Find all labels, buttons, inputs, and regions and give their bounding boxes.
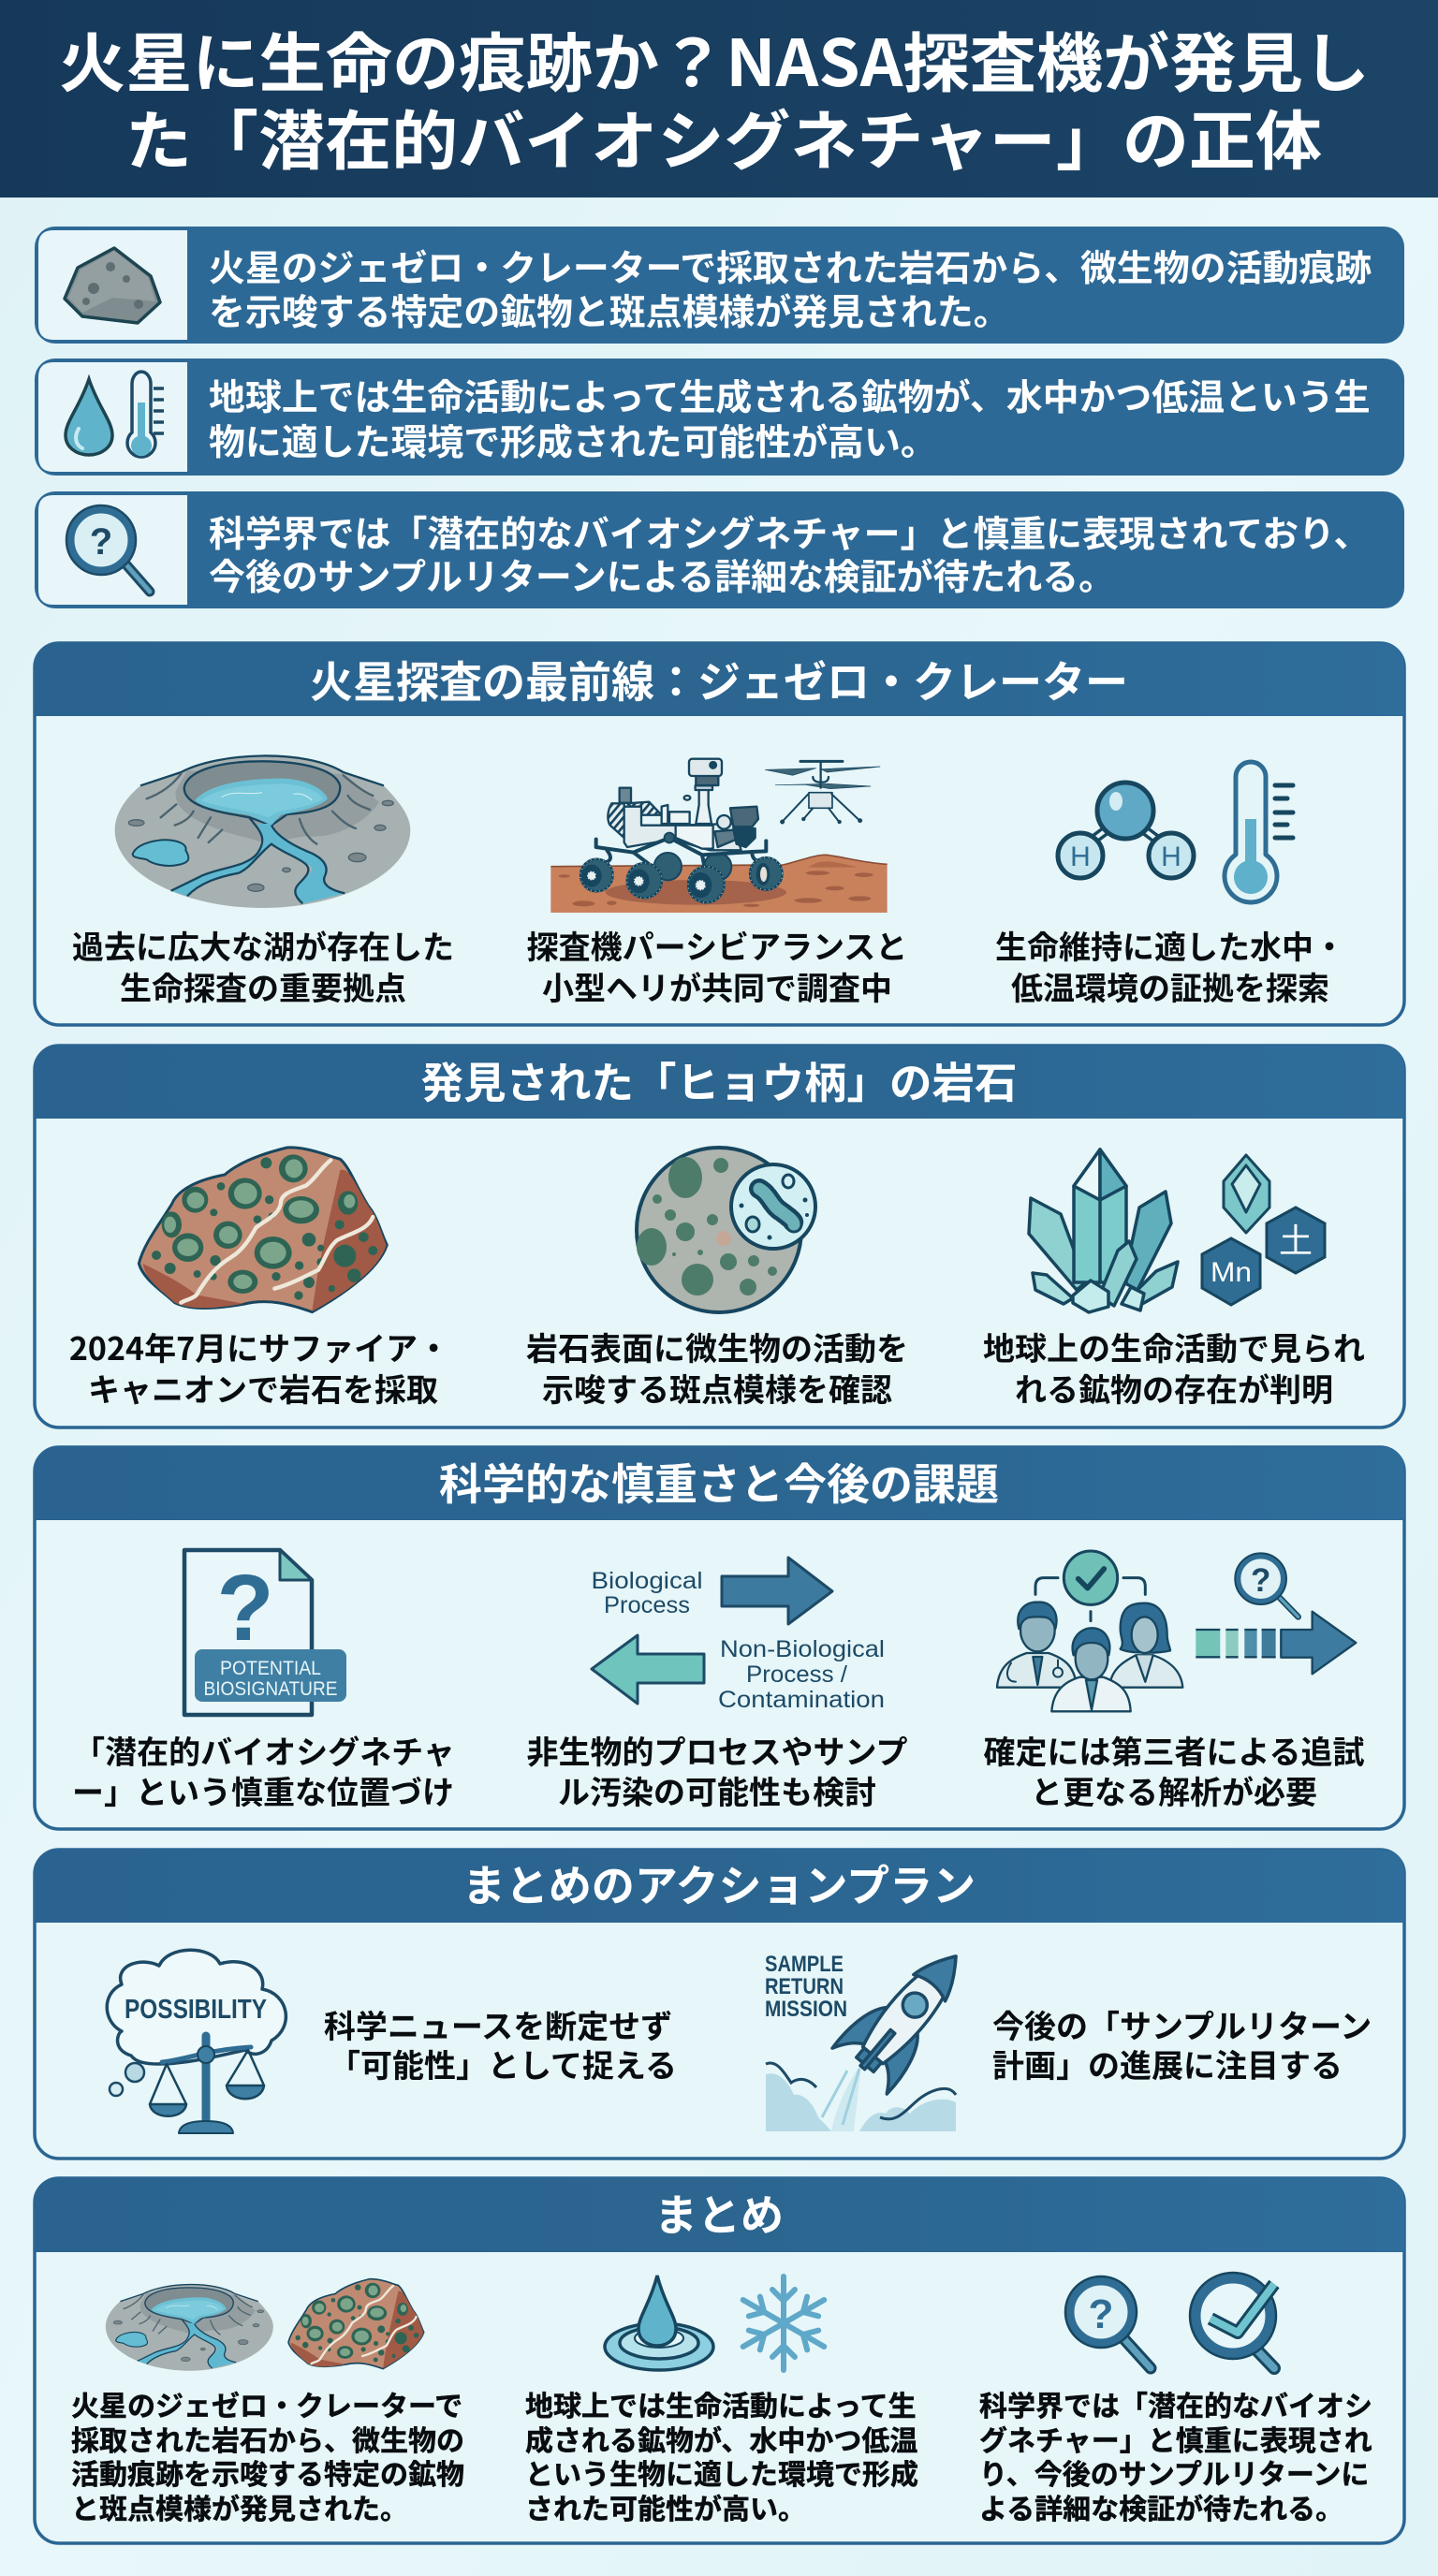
panel heading: まとめのアクションプラン bbox=[462, 1862, 976, 1910]
caption 3: れる鉱物の存在が判明 bbox=[1015, 1372, 1333, 1409]
mission label bbox=[765, 1952, 847, 2022]
icon: possibility cloud: POSSIBILITY bbox=[125, 1995, 267, 2025]
caption 3 bbox=[984, 1735, 1364, 1811]
caption 1: キャニオンで岩石を採取 bbox=[88, 1373, 438, 1409]
summary text 3: 今後のサンプルリターンによる詳細な検証が待たれる。 bbox=[209, 558, 1115, 598]
summary text 2: 地球上では生命活動によって生 bbox=[525, 2392, 917, 2422]
action text 1: 「可能性」として捉える bbox=[329, 2049, 677, 2085]
icon: drop with ripples bbox=[605, 2276, 713, 2370]
summary text 1: 火星のジェゼロ・クレーターで bbox=[71, 2392, 462, 2422]
panel: Jezero crater bbox=[35, 643, 1404, 1025]
summary text 1 bbox=[71, 2392, 464, 2525]
illustration: crater lake bbox=[115, 755, 410, 908]
icon: thermometer bbox=[1225, 762, 1293, 902]
smoke bbox=[766, 2073, 956, 2131]
caption 2 bbox=[527, 930, 907, 1007]
helicopter bbox=[765, 761, 880, 824]
rocket bbox=[832, 1933, 983, 2094]
icon: water molecule bbox=[1058, 783, 1194, 878]
summary text 3: グネチャー」と慎重に表現され bbox=[979, 2426, 1372, 2457]
summary text 3: 科学界では「潜在的なバイオシグネチャー」と慎重に表現されており、 bbox=[209, 515, 1370, 555]
summary text 3 bbox=[209, 515, 1370, 598]
icon: magnifier with question: ? bbox=[90, 521, 112, 563]
icon: mini leopard rock bbox=[288, 2279, 424, 2369]
caption 2 bbox=[527, 1735, 907, 1811]
panel: leopard rock bbox=[35, 1046, 1404, 1427]
caption 3 bbox=[983, 1332, 1365, 1409]
ground bbox=[550, 855, 888, 913]
summary text 3: り、今後のサンプルリターンに bbox=[979, 2460, 1369, 2491]
summary text 2: された可能性が高い。 bbox=[525, 2494, 806, 2525]
icon: snowflake bbox=[738, 2276, 829, 2370]
summary bar 2 bbox=[35, 359, 1404, 476]
caption 3: 確定には第三者による追試 bbox=[984, 1735, 1364, 1771]
summary text 1: 採取された岩石から、微生物の bbox=[71, 2426, 464, 2457]
caption 2: ル汚染の可能性も検討 bbox=[558, 1776, 876, 1811]
illustration: rover and helicopter bbox=[550, 759, 888, 913]
caption 3 bbox=[995, 930, 1345, 1007]
caption 1: 2024年7月にサファイア・ bbox=[69, 1324, 449, 1369]
icon: element hexagon Mn bbox=[1202, 1238, 1260, 1305]
caption 2: 非生物的プロセスやサンプ bbox=[527, 1735, 907, 1771]
panel: scientific caution bbox=[35, 1447, 1404, 1829]
action text 2: 計画」の進展に注目する bbox=[992, 2049, 1343, 2085]
caption 1 bbox=[72, 1735, 455, 1811]
summary text 1 bbox=[209, 249, 1372, 333]
panel heading bbox=[35, 1447, 1404, 1520]
summary text 1: と斑点模様が発見された。 bbox=[71, 2494, 408, 2525]
illustration: peer review team bbox=[997, 1551, 1356, 1711]
rear wheels bbox=[654, 853, 731, 881]
icon: balance scale bbox=[150, 2036, 264, 2133]
icon: document with question mark bbox=[184, 1550, 346, 1715]
illustration: crystals bbox=[1029, 1149, 1178, 1312]
summary text 2: という生物に適した環境で形成 bbox=[525, 2460, 918, 2491]
panel heading bbox=[35, 2178, 1404, 2252]
illustration: spotted rock with microbe inset bbox=[637, 1148, 815, 1312]
caption 1: 「潜在的バイオシグネチャ bbox=[73, 1735, 455, 1771]
action text 2: 今後の「サンプルリターン bbox=[992, 2010, 1372, 2045]
summary bar 3 bbox=[35, 491, 1404, 608]
left doctor bbox=[997, 1603, 1077, 1688]
icon: magnifier with question bbox=[66, 505, 150, 592]
title line 1: 火星に生命の痕跡か？NASA探査機が発見し bbox=[59, 11, 1370, 105]
summary text 2: 物に適した環境で形成された可能性が高い。 bbox=[209, 423, 937, 463]
panel heading: 科学的な慎重さと今後の課題 bbox=[439, 1460, 999, 1509]
action text 1: 科学ニュースを断定せず bbox=[324, 2010, 672, 2045]
illustration: sample return rocket bbox=[765, 1933, 983, 2131]
title line 2: た「潜在的バイオシグネチャー」の正体 bbox=[125, 89, 1322, 183]
progress arrow bbox=[1196, 1612, 1356, 1674]
magnifier with question bbox=[1235, 1553, 1299, 1617]
arrow: non-biological process bbox=[592, 1635, 885, 1713]
front wheels bbox=[580, 857, 783, 902]
caption 1: 過去に広大な湖が存在した bbox=[72, 929, 454, 966]
icon: thermometer bbox=[127, 372, 164, 457]
arrow: non-biological process: Non-Biological bbox=[720, 1636, 885, 1662]
panel: summary bbox=[35, 2178, 1404, 2543]
caption 2: 探査機パーシビアランスと bbox=[527, 930, 907, 966]
action text 2 bbox=[992, 2010, 1372, 2085]
panel: action plan bbox=[35, 1850, 1404, 2159]
icon: magnifier question: ? bbox=[1089, 2291, 1113, 2337]
summary text 2 bbox=[525, 2392, 918, 2525]
centre doctor bbox=[1051, 1628, 1131, 1711]
panel heading: まとめ bbox=[654, 2191, 784, 2240]
summary text 2: 成される鉱物が、水中かつ低温 bbox=[525, 2425, 917, 2457]
icon: document with question mark: POTENTIAL bbox=[220, 1658, 321, 1679]
caption 3: 地球上の生命活動で見られ bbox=[983, 1332, 1365, 1368]
icon: document with question mark: BIOSIGNATURE bbox=[204, 1678, 337, 1700]
panel heading bbox=[35, 643, 1404, 716]
illustration: leopard-spot rock bbox=[139, 1148, 387, 1312]
panel heading bbox=[35, 1850, 1404, 1923]
icon: small gem bbox=[1224, 1155, 1269, 1233]
caption 2: 岩石表面に微生物の活動を bbox=[526, 1332, 908, 1368]
summary text 1: を示唆する特定の鉱物と斑点模様が発見された。 bbox=[209, 293, 1010, 333]
arrow: non-biological process: Contamination bbox=[718, 1687, 885, 1713]
action text 1 bbox=[324, 2010, 677, 2085]
icon: mini crater bbox=[106, 2285, 273, 2371]
caption 3: と更なる解析が必要 bbox=[1031, 1775, 1317, 1811]
icon: element hexagon Mn: Mn bbox=[1211, 1257, 1252, 1288]
summary bar 1 bbox=[35, 227, 1404, 344]
summary text 1: 火星のジェゼロ・クレーターで採取された岩石から、微生物の活動痕跡 bbox=[209, 249, 1372, 289]
mission label: RETURN bbox=[765, 1974, 844, 1999]
arrow: biological process bbox=[592, 1558, 832, 1624]
caption 1: ー」という慎重な位置づけ bbox=[72, 1776, 454, 1811]
caption 3: 低温環境の証拠を探索 bbox=[1011, 972, 1329, 1007]
icon: element hexagon 土: 土 bbox=[1279, 1222, 1313, 1260]
icon: magnifier check bbox=[1190, 2273, 1276, 2368]
summary text 2: 地球上では生命活動によって生成される鉱物が、水中かつ低温という生 bbox=[209, 378, 1371, 418]
summary text 3: よる詳細な検証が待たれる。 bbox=[979, 2494, 1343, 2525]
summary text 2 bbox=[209, 378, 1371, 463]
icon: water drop bbox=[66, 379, 112, 455]
caption 1: 生命探査の重要拠点 bbox=[120, 972, 406, 1007]
caption 2: 示唆する斑点模様を確認 bbox=[542, 1373, 892, 1409]
right doctor bbox=[1109, 1603, 1182, 1688]
caption 3: 生命維持に適した水中・ bbox=[995, 930, 1345, 966]
summary text 3: 科学界では「潜在的なバイオシ bbox=[979, 2392, 1372, 2422]
caption 1 bbox=[69, 1324, 449, 1409]
magnifier with question: ? bbox=[1251, 1562, 1270, 1599]
caption 1 bbox=[72, 929, 454, 1007]
icon: magnifier question bbox=[1065, 2276, 1151, 2368]
icon: water molecule: H bbox=[1070, 842, 1091, 872]
icon: water molecule: H bbox=[1161, 842, 1181, 872]
mission label: MISSION bbox=[765, 1997, 847, 2022]
icon: element hexagon 土 bbox=[1267, 1208, 1325, 1273]
summary text 3 bbox=[979, 2392, 1372, 2525]
panel heading bbox=[35, 1046, 1404, 1119]
arrow: biological process: Process bbox=[604, 1592, 690, 1618]
caption 2: 小型ヘリが共同で調査中 bbox=[542, 971, 892, 1007]
arrow: non-biological process: Process / bbox=[746, 1661, 847, 1688]
icon: document with question mark: ? bbox=[216, 1556, 274, 1661]
icon: grey rock bbox=[65, 248, 160, 323]
summary text 1: 活動痕跡を示唆する特定の鉱物 bbox=[71, 2460, 464, 2491]
rover suspension bbox=[596, 838, 766, 869]
icon: possibility cloud bbox=[107, 1950, 286, 2096]
panel heading: 発見された「ヒョウ柄」の岩石 bbox=[420, 1060, 1018, 1107]
mission label: SAMPLE bbox=[765, 1952, 844, 1977]
panel heading: 火星探査の最前線：ジェゼロ・クレーター bbox=[310, 658, 1128, 707]
rover body bbox=[608, 759, 758, 850]
title banner bbox=[0, 0, 1438, 198]
arrow: biological process: Biological bbox=[592, 1568, 702, 1594]
check badge bbox=[1035, 1551, 1145, 1621]
caption 2 bbox=[526, 1332, 908, 1409]
